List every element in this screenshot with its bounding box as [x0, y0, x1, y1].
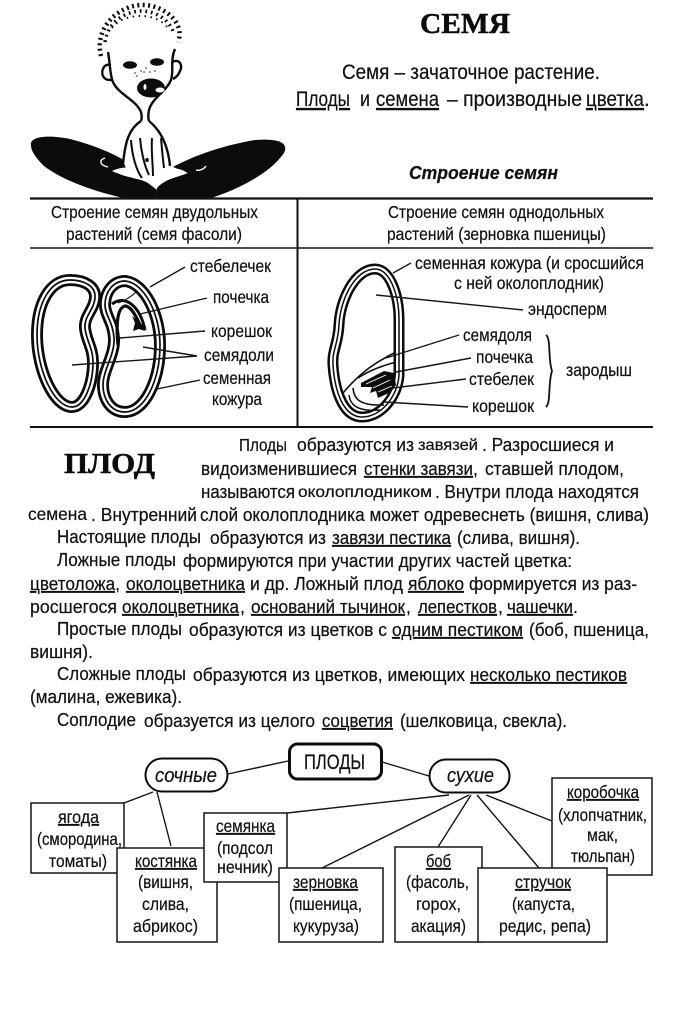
box: legume: боб [426, 851, 451, 871]
text block: fruit description: цветоложа, [30, 574, 120, 594]
title: seed: СЕМЯ [420, 8, 510, 40]
pill: juicy [146, 758, 228, 792]
box: legume: (фасоль, [406, 872, 469, 892]
box: achene: семянка [216, 816, 275, 836]
text block: fruit description: слой околоплодника может одревеснеть (вишня, слива) [200, 505, 649, 525]
text block: fruit description: , [473, 459, 478, 479]
labels: bean seed parts: семенная [203, 368, 271, 388]
labels: wheat grain parts: семядоля [463, 325, 532, 345]
text block: fruit description: (боб, пшеница, [529, 620, 649, 640]
labels: wheat grain parts: стебелек [469, 369, 534, 389]
text block: fruit description: образуются из [210, 528, 326, 548]
box: achene: (подсол [217, 838, 273, 858]
illustration: seated baby with pacifier [31, 5, 285, 199]
text block: fruit description: лепестков [418, 597, 497, 617]
box: achene [204, 813, 287, 882]
text block: fruit description: образуются из цветков, имеющих [193, 665, 465, 685]
labels: wheat grain parts [376, 253, 644, 416]
box: caryopsis: (пшеница, [289, 894, 362, 914]
labels: wheat grain parts: почечка [476, 347, 533, 367]
pill: juicy: сочные [155, 765, 217, 787]
box: legume: горох, [416, 894, 461, 914]
text block: fruit description: стенки завязи [364, 459, 473, 479]
table: seed structure [30, 198, 653, 427]
text block: fruit description: околоплодником [298, 484, 432, 501]
labels: wheat grain parts: с ней околоплодник) [454, 273, 604, 293]
text block: fruit description: соцветия [322, 711, 393, 731]
definition text: и [360, 88, 370, 111]
text block: fruit description: (слива, вишня). [457, 528, 580, 548]
text block: fruit description: яблоко [408, 574, 464, 594]
box: fruits root: ПЛОДЫ [304, 751, 365, 774]
text block: fruit description: . Внутренний [91, 505, 197, 525]
column heading: dicot seeds: Строение семян двудольных [51, 202, 258, 222]
text block: fruit description: видоизменившиеся [201, 459, 357, 479]
box: silique: (капуста, [512, 894, 575, 914]
box: fruits root [290, 744, 382, 779]
box: capsule: коробочка [567, 782, 639, 802]
text block: fruit description: . Разросшиеся и [482, 435, 614, 455]
labels: bean seed parts: кожура [212, 389, 262, 409]
pill: dry [430, 760, 510, 792]
column heading: dicot seeds: растений (семя фасоли) [66, 224, 242, 244]
labels: wheat grain parts: зародыш [566, 360, 632, 380]
text block: fruit description: околоцветника [122, 597, 240, 617]
labels: bean seed parts: семядоли [204, 345, 274, 365]
box: silique: стручок [515, 872, 571, 892]
text block: fruit description: . [573, 597, 578, 617]
text block: fruit description: Соплодие [57, 710, 136, 730]
title: fruit: ПЛОД [64, 448, 155, 480]
text block: fruit description: семена [28, 504, 87, 524]
labels: wheat grain parts: эндосперм [528, 299, 607, 319]
text block: fruit description: околоцветника [126, 574, 246, 594]
text block: fruit description: (малина, ежевика). [30, 687, 182, 707]
box: drupe [117, 848, 217, 942]
text block: fruit description: несколько пестиков [470, 665, 627, 685]
column heading: monocot seeds: Строение семян однодольных [388, 202, 604, 222]
column heading: monocot seeds [387, 202, 606, 244]
text block: fruit description: Настоящие плоды [57, 527, 201, 547]
definition text: Семя – зачаточное растение. [342, 61, 600, 84]
box: legume: акация) [411, 916, 466, 936]
text block: fruit description: образуется из целого [144, 711, 315, 731]
box: berry: (смородина, [37, 829, 122, 849]
box: caryopsis: зерновка [293, 872, 358, 892]
labels: wheat grain parts: корешок [472, 396, 534, 416]
text block: fruit description: , [406, 597, 411, 617]
pill: dry: сухие [447, 765, 494, 787]
text block: fruit description: ставшей плодом, [485, 459, 624, 479]
box: achene: нечник) [217, 857, 273, 877]
diagram: wheat grain [333, 269, 399, 417]
text block: fruit description: завязей [418, 437, 478, 454]
box: drupe: костянка [135, 851, 197, 871]
text block: fruit description [28, 435, 649, 731]
text block: fruit description: завязи пестика [332, 528, 452, 548]
labels: wheat grain parts: семенная кожура (и сросшийся [415, 253, 644, 273]
column heading: dicot seeds [51, 202, 258, 244]
labels: bean seed parts: почечка [213, 287, 269, 307]
box: berry: томаты) [49, 851, 107, 871]
subheading: seed structure: Строение семян [409, 163, 558, 183]
text block: fruit description: образуются из цветков с [189, 620, 387, 640]
diagram: fruit classification [31, 744, 652, 942]
box: berry: ягода [58, 807, 99, 827]
labels: bean seed parts: стебелечек [190, 256, 271, 276]
text block: fruit description: называются [201, 482, 295, 502]
text block: fruit description: , [240, 597, 245, 617]
box: silique: редис, репа) [499, 916, 591, 936]
box: caryopsis [279, 868, 383, 942]
text block: fruit description: одним пестиком [392, 620, 523, 640]
box: legume [395, 847, 482, 942]
box: silique [478, 868, 607, 942]
column heading: monocot seeds: растений (зерновка пшеницы) [387, 224, 606, 244]
box: berry [31, 803, 124, 873]
text block: fruit description: , [498, 597, 503, 617]
box: drupe: (вишня, [138, 872, 193, 892]
text block: fruit description: формируются при участии других частей цветка: [183, 551, 572, 571]
box: drupe: слива, [142, 894, 189, 914]
text block: fruit description: образуются из [297, 435, 414, 455]
text block: fruit description: росшегося [30, 597, 117, 617]
labels: bean seed parts: корешок [211, 321, 272, 341]
box: drupe: абрикос) [133, 916, 198, 936]
definition text: семена [376, 88, 439, 111]
text block: fruit description: формируется из раз- [469, 574, 637, 594]
labels: bean seed parts [72, 256, 274, 409]
definition text: цветка [586, 88, 644, 111]
text block: fruit description: оснований тычинок [251, 597, 405, 617]
text block: fruit description: Плоды [239, 435, 287, 455]
box: capsule [552, 778, 652, 875]
definition text: – производные [447, 88, 582, 111]
text block: fruit description: Сложные плоды [57, 664, 186, 684]
text block: fruit description: (шелковица, свекла). [400, 711, 567, 731]
text block: fruit description: Простые плоды [57, 619, 182, 639]
text block: fruit description: чашечки [507, 597, 573, 617]
box: caryopsis: кукуруза) [293, 916, 359, 936]
definition text: Плоды [296, 88, 350, 111]
definition text [296, 61, 650, 111]
box: capsule: тюльпан) [571, 846, 635, 866]
text block: fruit description: и др. Ложный плод [250, 574, 403, 594]
box: capsule: (хлопчатник, [558, 805, 647, 825]
definition text: . [644, 88, 650, 111]
diagram: bean seed [37, 280, 160, 412]
text block: fruit description: Ложные плоды [57, 550, 176, 570]
box: capsule: мак, [587, 825, 618, 845]
text block: fruit description: . Внутри плода находятся [435, 482, 639, 502]
text block: fruit description: вишня). [30, 642, 93, 662]
